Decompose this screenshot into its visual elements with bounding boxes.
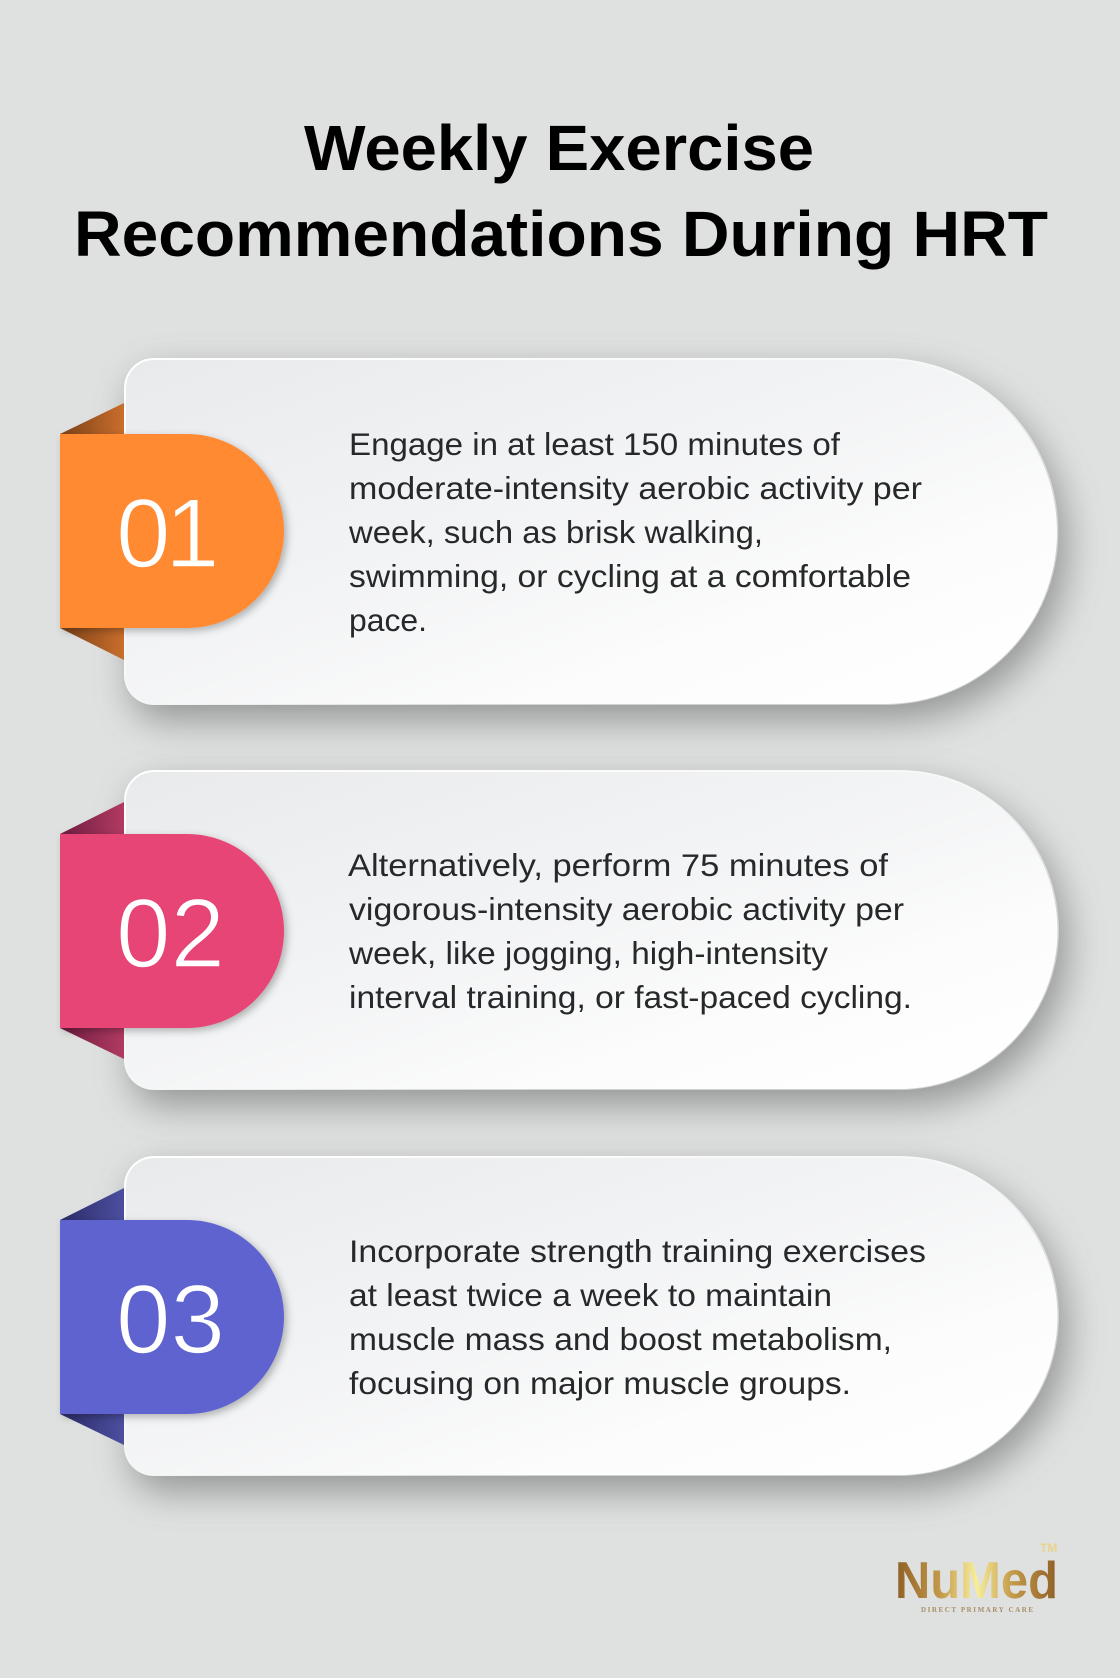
panel: step 1 xyxy=(60,358,1066,720)
text block: step 1: swimming, or cycling at a comfortable xyxy=(349,558,911,594)
text block: step 2 xyxy=(348,847,912,1015)
text block: step 3: muscle mass and boost metabolism, xyxy=(349,1321,892,1357)
badge: 03 xyxy=(60,1220,284,1414)
ribbon fold: step 3 xyxy=(60,1188,124,1445)
badge: 01: 01 xyxy=(116,478,220,588)
text block: step 2: week, like jogging, high-intensity xyxy=(348,935,828,971)
logo: NuMed: DIRECT PRIMARY CARE xyxy=(921,1606,1033,1614)
text block: step 3: Incorporate strength training exercises xyxy=(349,1233,926,1269)
text block: step 3: at least twice a week to maintain xyxy=(349,1277,832,1313)
logo: NuMed: TM xyxy=(1040,1541,1057,1555)
text block: step 2: interval training, or fast-paced cycling. xyxy=(349,979,912,1015)
text block: step 1: pace. xyxy=(349,602,427,638)
text block: step 3 xyxy=(349,1233,926,1401)
title: Weekly Exercise xyxy=(304,112,814,184)
text block: step 1 xyxy=(348,426,922,638)
text block: step 2: vigorous-intensity aerobic activity per xyxy=(349,891,904,927)
title xyxy=(74,112,1048,270)
title: Recommendations During HRT xyxy=(74,198,1048,270)
badge: 03: 03 xyxy=(116,1264,225,1374)
ribbon fold: step 2 xyxy=(60,802,124,1059)
text block: step 1: week, such as brisk walking, xyxy=(348,514,763,550)
badge: 01 xyxy=(60,434,284,628)
text block: step 1: Engage in at least 150 minutes of xyxy=(349,426,840,462)
ribbon fold: step 1 xyxy=(60,403,124,660)
badge: 02 xyxy=(60,834,284,1028)
panel: step 3 xyxy=(60,1156,1067,1491)
logo: NuMed: NuMed xyxy=(895,1552,1058,1610)
text block: step 1: moderate-intensity aerobic activity per xyxy=(349,470,922,506)
badge: 02: 02 xyxy=(116,878,225,988)
panel: step 2 xyxy=(60,770,1067,1105)
text block: step 2: Alternatively, perform 75 minutes of xyxy=(348,847,888,883)
text block: step 3: focusing on major muscle groups. xyxy=(349,1365,851,1401)
